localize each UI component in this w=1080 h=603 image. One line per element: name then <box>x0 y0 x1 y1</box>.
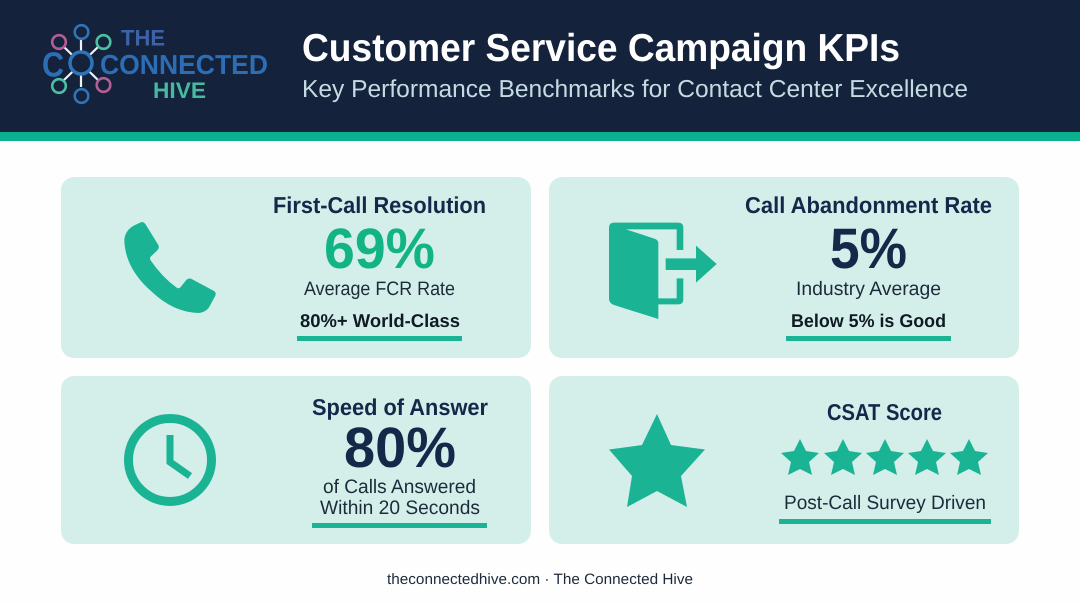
icon: large star <box>609 414 705 507</box>
metric: 69%: 69% <box>324 217 435 281</box>
logo: The Connected Hive: HIVE <box>153 78 206 103</box>
label: Within 20 Seconds <box>320 497 480 519</box>
panel: First-Call Resolution <box>61 177 531 358</box>
subtitle: Key Performance Benchmarks for Contact Center Excellence <box>302 76 968 103</box>
metric: 5%: 5% <box>830 217 907 281</box>
panel: Call Abandonment Rate <box>549 177 1019 358</box>
underline <box>297 336 462 341</box>
heading: CSAT Score <box>827 399 942 425</box>
heading: First-Call Resolution <box>273 192 486 218</box>
logo: The Connected Hive: C <box>42 46 64 84</box>
icon: phone <box>124 222 216 313</box>
panel: Speed of Answer <box>61 376 531 544</box>
benchmark: 80%+ World-Class <box>300 310 460 331</box>
heading: Speed of Answer <box>312 394 488 420</box>
metric: 80%: 80% <box>344 416 456 480</box>
underline <box>312 523 487 528</box>
label: Post-Call Survey Driven <box>784 492 986 514</box>
logo: The Connected Hive: THE <box>121 26 165 50</box>
benchmark: Below 5% is Good <box>791 310 946 331</box>
footer: theconnectedhive.com · The Connected Hive <box>387 571 693 588</box>
five star rating <box>781 439 988 475</box>
label <box>320 476 480 519</box>
underline <box>786 336 951 341</box>
icon: door exit <box>609 223 717 319</box>
title: Customer Service Campaign KPIs <box>302 27 900 70</box>
label: Industry Average <box>796 278 941 300</box>
underline <box>779 519 991 524</box>
label: Average FCR Rate <box>304 278 455 300</box>
icon: clock <box>128 418 212 502</box>
header banner <box>0 0 1080 141</box>
logo: The Connected Hive <box>42 25 268 103</box>
logo: The Connected Hive: CONNECTED <box>100 49 268 80</box>
label: of Calls Answered <box>323 476 476 498</box>
panel: CSAT Score <box>549 376 1019 544</box>
heading: Call Abandonment Rate <box>745 192 992 218</box>
